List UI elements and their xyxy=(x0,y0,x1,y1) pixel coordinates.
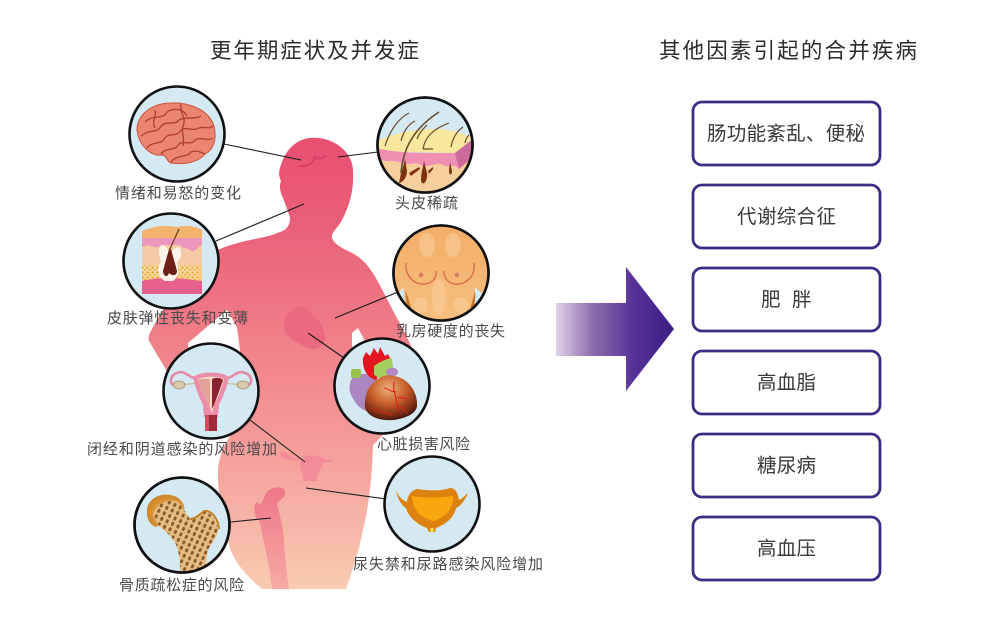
label: skin elasticity: 皮肤弹性丧失和变薄 xyxy=(107,310,248,327)
organ: brain arcs on head xyxy=(300,152,350,167)
box: bowel disorder and constipation: 肠功能紊乱、便秘 xyxy=(707,123,865,145)
box: obesity: 肥胖 xyxy=(761,289,812,311)
box: diabetes: 糖尿病 xyxy=(757,455,816,477)
heading: other causes of comorbidities: 其他因素引起的合并疾病 xyxy=(659,39,917,63)
label: thinning scalp: 头皮稀疏 xyxy=(395,195,458,212)
label: amenorrhea and vaginal infection: 闭经和阴道感染的风险增加 xyxy=(87,441,277,458)
label: breast firmness: 乳房硬度的丧失 xyxy=(396,323,505,340)
organ: small femur xyxy=(254,487,289,589)
icon: breasts xyxy=(393,225,489,321)
leader lines xyxy=(216,144,398,522)
box: diabetes xyxy=(693,434,880,497)
label: mood and irritability: 情绪和易怒的变化 xyxy=(115,185,241,202)
box: metabolic syndrome: 代谢综合征 xyxy=(737,206,836,228)
organ: small heart xyxy=(284,307,325,349)
box: hypertension xyxy=(693,517,880,580)
icon: brain xyxy=(130,86,224,182)
organ: small uterus xyxy=(280,452,332,481)
label: heart damage risk: 心脏损害风险 xyxy=(377,436,470,453)
box: hypertension: 高血压 xyxy=(757,538,816,560)
box: hyperlipidemia xyxy=(693,351,880,414)
box: bowel disorder and constipation xyxy=(693,102,880,165)
box: obesity xyxy=(693,268,880,331)
icon: skin cross-section xyxy=(124,214,218,308)
body silhouette xyxy=(149,138,420,589)
icon: bladder xyxy=(384,456,480,552)
heading: menopause symptoms and complications: 更年期症状及并发症 xyxy=(210,39,419,63)
arrow xyxy=(556,267,674,391)
box: hyperlipidemia: 高血脂 xyxy=(757,372,816,394)
icon: osteoporotic femur xyxy=(134,478,230,573)
icon: scalp and thinning hair xyxy=(377,98,473,193)
label: osteoporosis risk: 骨质疏松症的风险 xyxy=(119,577,244,594)
label: urinary incontinence and infection: 尿失禁和尿路感染风险增加 xyxy=(353,556,543,573)
icon: anatomical heart xyxy=(334,338,430,434)
icon: uterus and ovaries xyxy=(164,344,258,438)
box: metabolic syndrome xyxy=(693,185,880,248)
